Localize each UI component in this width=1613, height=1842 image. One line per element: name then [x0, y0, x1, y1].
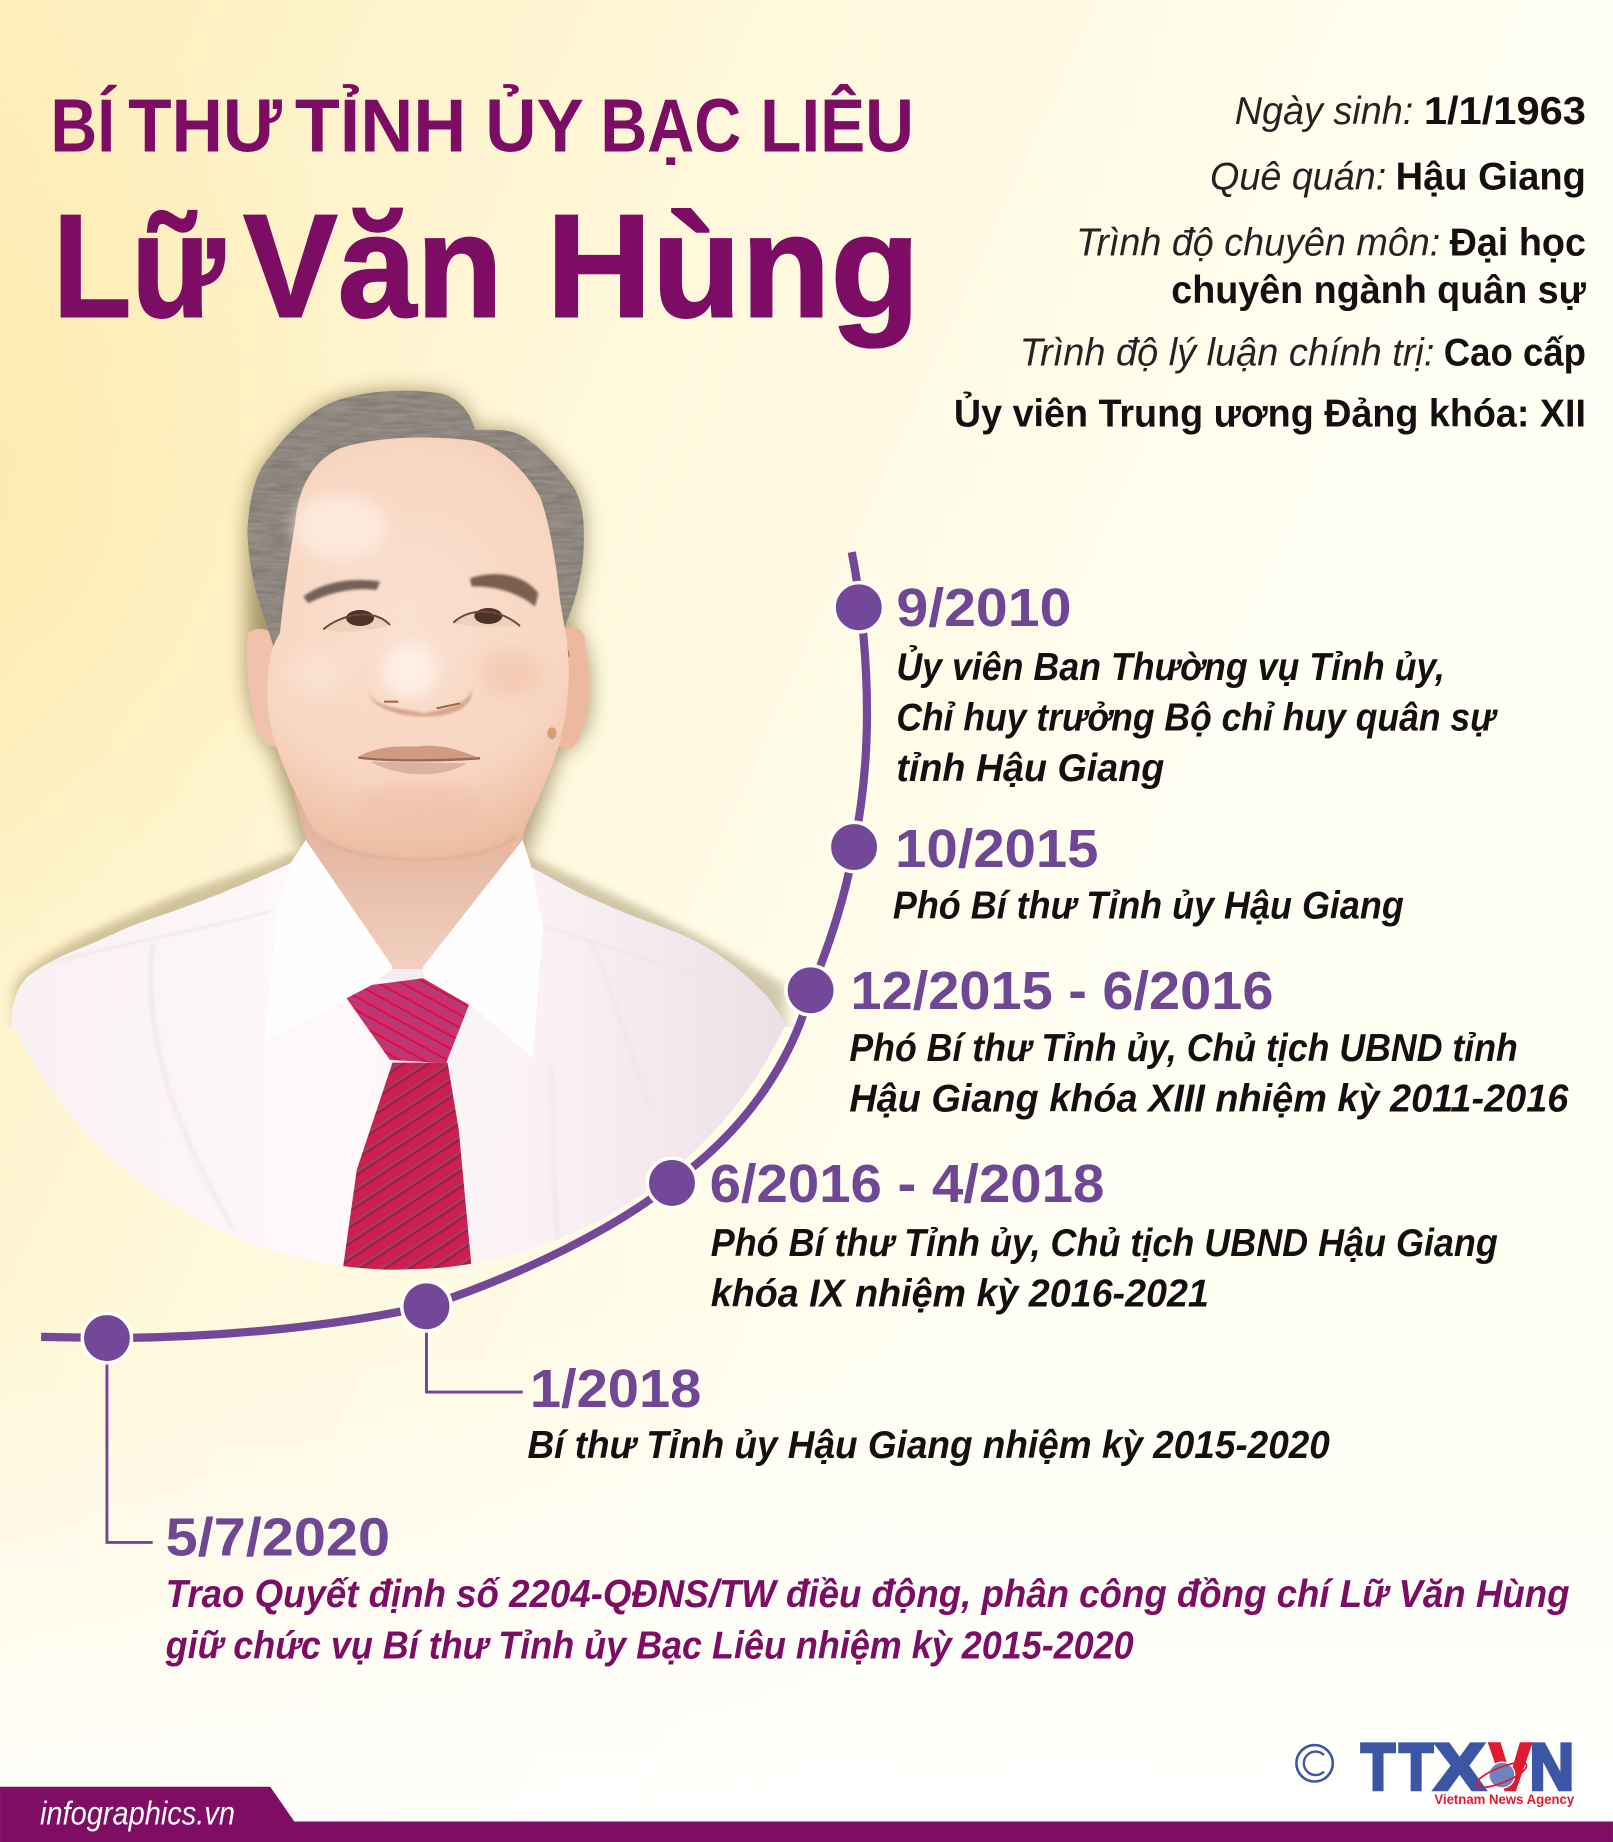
left ear [246, 628, 276, 746]
event 5/7/2020 [165, 1507, 1570, 1668]
event 9/2010: Chỉ huy trưởng Bộ chỉ huy quân sự [896, 697, 1499, 740]
tie blade [342, 1063, 472, 1272]
event 9/2010: 9/2010 [896, 578, 1071, 638]
event 6/2016 - 4/2018: khóa IX nhiệm kỳ 2016-2021 [711, 1272, 1209, 1315]
event 5/7/2020: 5/7/2020 [166, 1507, 390, 1567]
chin crease [327, 837, 517, 860]
personal information block: Đại học [1450, 222, 1586, 265]
personal information block: chuyên ngành quân sự [1171, 269, 1587, 312]
event 6/2016 - 4/2018: 6/2016 - 4/2018 [710, 1154, 1104, 1214]
left eye [323, 610, 390, 632]
personal information block: Trình độ chuyên môn: [1076, 222, 1440, 265]
connector 5/7/2020 [107, 1360, 153, 1542]
event 5/7/2020: Trao Quyết định số 2204-QĐNS/TW điều động, phân công đồng chí Lữ Văn Hùng [166, 1573, 1570, 1616]
neck [293, 793, 533, 969]
personal information block: Quê quán: [1210, 156, 1386, 199]
event 12/2015 - 6/2016 [849, 961, 1569, 1120]
event 9/2010 [896, 578, 1499, 790]
title: position: LIÊU [760, 83, 914, 168]
event 9/2010: Ủy viên Ban Thường vụ Tỉnh ủy, [896, 645, 1445, 689]
face highlights and shading [287, 493, 540, 830]
logo: TTXVN: V [1490, 1730, 1531, 1804]
personal information block: 1/1/1963 [1424, 90, 1586, 133]
connector 1/2018 [426, 1327, 523, 1392]
event 10/2015 [893, 819, 1404, 928]
personal information block: Hậu Giang [1396, 156, 1586, 199]
personal information block: Ngày sinh: [1235, 90, 1413, 133]
right collar [423, 840, 543, 1058]
title: name: Văn [243, 185, 503, 349]
shoulder shadow [15, 853, 785, 1030]
title: name [53, 185, 920, 349]
event 12/2015 - 6/2016: Hậu Giang khóa XIII nhiệm kỳ 2011-2016 [849, 1077, 1569, 1120]
event 6/2016 - 4/2018: Phó Bí thư Tỉnh ủy, Chủ tịch UBND Hậu Giang [711, 1222, 1498, 1265]
nose [368, 690, 472, 717]
event 1/2018 [527, 1359, 1330, 1467]
event 10/2015: 10/2015 [895, 819, 1098, 879]
timeline curve [41, 552, 883, 1542]
title: position: TỈNH [295, 84, 466, 168]
logo: TTXVN: T [1399, 1730, 1433, 1804]
logo: TTXVN: Vietnam News Agency [1434, 1792, 1575, 1807]
personal information block: Cao cấp [1444, 331, 1586, 374]
footer site label: infographics.vn [40, 1794, 235, 1831]
timeline dots [82, 583, 883, 1363]
right eye [453, 608, 520, 627]
personal information block: Ủy viên Trung ương Đảng khóa: XII [954, 391, 1586, 435]
head shadow [246, 391, 590, 880]
event 5/7/2020: giữ chức vụ Bí thư Tỉnh ủy Bạc Liêu nhiệm kỳ 2015-2020 [165, 1625, 1134, 1668]
right ear [558, 627, 590, 749]
event 9/2010: tỉnh Hậu Giang [896, 747, 1165, 790]
shirt [11, 863, 801, 1297]
shirt folds [49, 912, 268, 1228]
logo: TTXVN: T [1361, 1730, 1395, 1804]
event 1/2018: 1/2018 [530, 1359, 701, 1419]
torso [11, 793, 801, 1297]
title: name: Hùng [546, 185, 920, 349]
collar band [377, 969, 424, 980]
event 10/2015: Phó Bí thư Tỉnh ủy Hậu Giang [893, 885, 1404, 928]
personal information block [954, 90, 1587, 435]
logo: TTXVN: X [1434, 1730, 1485, 1804]
face [267, 438, 569, 863]
event 6/2016 - 4/2018 [710, 1154, 1498, 1315]
title: position: THƯ [128, 84, 283, 168]
tie knot [347, 978, 469, 1063]
mouth [358, 746, 480, 774]
footer band [0, 1787, 1613, 1842]
event 1/2018: Bí thư Tỉnh ủy Hậu Giang nhiệm kỳ 2015-2020 [527, 1424, 1330, 1467]
logo: TTXVN: N [1530, 1730, 1574, 1804]
event 12/2015 - 6/2016: 12/2015 - 6/2016 [851, 961, 1273, 1021]
hair [247, 391, 584, 657]
title: position: BẠC [600, 84, 741, 168]
title: position: ỦY [485, 84, 584, 168]
right eyebrow [470, 574, 538, 607]
title: name: Lữ [53, 185, 225, 349]
mole [547, 727, 557, 739]
title: position: BÍ [51, 84, 117, 168]
collar and tie [265, 840, 543, 1272]
logo: TTXVN [1361, 1730, 1575, 1807]
portrait photo [11, 391, 801, 1297]
ears, hair and face [246, 391, 590, 863]
personal information block: Trình độ lý luận chính trị: [1020, 331, 1434, 374]
left collar [290, 840, 392, 968]
icon: copyright [1296, 1745, 1333, 1782]
title: position [51, 83, 914, 168]
event 12/2015 - 6/2016: Phó Bí thư Tỉnh ủy, Chủ tịch UBND tỉnh [849, 1027, 1518, 1070]
left eyebrow [303, 580, 380, 603]
